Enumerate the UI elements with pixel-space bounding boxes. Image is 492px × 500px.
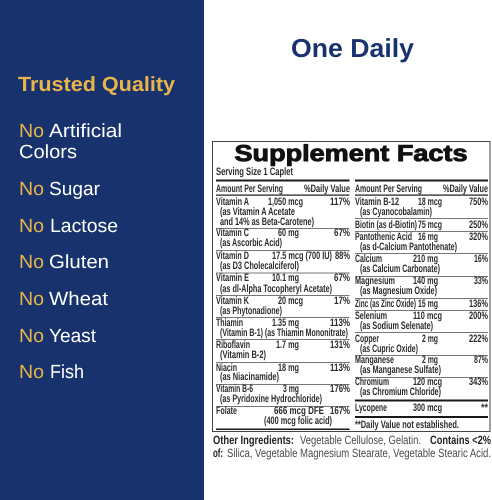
row: vitamin d: 17.5 mcg (700 IU) (272, 250, 332, 262)
row: manganese: (as Manganese Sulfate) (360, 364, 441, 376)
table header: right column: Amount Per Serving (355, 183, 422, 195)
row: pantothenic acid: 16 mg (418, 231, 438, 243)
heading: one daily: One Daily (291, 33, 415, 63)
other ingredients (213, 433, 491, 460)
row: niacin: (as Niacinamide) (220, 371, 279, 383)
row: vitamin a: (as Vitamin A Acetate (220, 206, 295, 218)
table header: left column: %Daily Value (304, 183, 350, 195)
row: magnesium: (as Magnesium Oxide) (360, 285, 437, 297)
row: lycopene: Lycopene (355, 402, 387, 414)
claim: no gluten: Gluten (49, 252, 109, 273)
row: pantothenic acid: Pantothenic Acid (355, 231, 412, 243)
row: vitamin k (216, 295, 350, 317)
row: vitamin b-6: 176% (330, 383, 350, 395)
row: manganese: Manganese (355, 354, 394, 366)
row: chromium (355, 376, 488, 398)
row: vitamin b-6 (216, 383, 350, 405)
row: riboflavin (216, 339, 350, 361)
serving size: Serving Size 1 Caplet (216, 166, 293, 178)
row: vitamin a: 1,050 mcg (268, 196, 303, 208)
row: calcium: 210 mg (413, 253, 438, 265)
other ingredients: Vegetable Cellulose, Gelatin. (300, 433, 421, 447)
row: vitamin e: Vitamin E (216, 272, 249, 284)
claim: no yeast: Yeast (49, 326, 97, 347)
row: zinc: 15 mg (418, 298, 438, 310)
claim: no sugar (19, 179, 101, 200)
row: manganese: 2 mg (422, 354, 438, 366)
row: vitamin k: 20 mcg (278, 295, 303, 307)
row: magnesium: Magnesium (355, 275, 395, 287)
row: niacin (216, 362, 350, 383)
row: vitamin k: 17% (334, 295, 350, 307)
claim: no wheat: Wheat (49, 289, 109, 310)
row: vitamin a: Vitamin A (216, 196, 249, 208)
panel: trusted quality (0, 0, 204, 500)
claim: no wheat: No (19, 289, 44, 310)
row: copper: Copper (355, 333, 380, 345)
row: calcium: Calcium (355, 253, 382, 265)
claim: no artificial colors: Artificial (49, 121, 122, 142)
row: selenium: 110 mcg (413, 310, 442, 322)
claim: no gluten: No (19, 252, 44, 273)
row: calcium: (as Calcium Carbonate) (360, 263, 440, 275)
row: copper (355, 333, 488, 355)
row: vitamin k: (as Phytonadione) (220, 305, 282, 317)
row: thiamin: (Vitamin B-1) (as Thiamin Mononitrate) (220, 327, 348, 339)
row: vitamin a: and 14% as Beta-Carotene) (220, 216, 314, 228)
claim: no fish: No (19, 362, 44, 383)
row: magnesium: 140 mg (413, 275, 438, 287)
row: vitamin e: 10.1 mg (272, 272, 299, 284)
row: riboflavin: 1.7 mg (276, 339, 299, 351)
table header: left column: Amount Per Serving (216, 183, 283, 195)
row: niacin: 18 mg (278, 362, 299, 374)
row: biotin: 75 mcg (418, 219, 442, 231)
row: vitamin d: (as D3 Cholecalciferol) (220, 260, 299, 272)
row: vitamin e: 67% (334, 272, 350, 284)
claim: no lactose: Lactose (50, 216, 118, 237)
row: chromium: (as Chromium Chloride) (360, 386, 441, 398)
row: vitamin b-12 (355, 196, 488, 218)
row: magnesium (355, 275, 488, 297)
claim: no lactose (19, 216, 118, 237)
claim: no gluten (19, 252, 109, 273)
row: chromium: Chromium (355, 376, 389, 388)
row: thiamin: 1.35 mg (272, 317, 299, 329)
row: selenium (355, 310, 488, 332)
claim: no fish: Fish (50, 362, 84, 383)
row: vitamin d: Vitamin D (216, 250, 249, 262)
row: niacin: Niacin (216, 362, 237, 374)
row: manganese (355, 354, 488, 376)
row: thiamin: Thiamin (216, 317, 243, 329)
row: folate: Folate (216, 405, 237, 417)
row: vitamin b-12: 18 mcg (418, 196, 442, 208)
row: vitamin c: 67% (334, 227, 350, 239)
row: vitamin c: (as Ascorbic Acid) (220, 237, 282, 249)
row: riboflavin: Riboflavin (216, 339, 250, 351)
claim: no yeast: No (19, 326, 44, 347)
row: vitamin b-6: Vitamin B-6 (216, 383, 253, 395)
row: vitamin b-12: (as Cyanocobalamin) (360, 206, 432, 218)
claim: no wheat (19, 289, 109, 310)
row: lycopene: ** (481, 402, 489, 414)
row: vitamin e: (as dl-Alpha Tocopheryl Acetate) (220, 283, 332, 295)
claim: no lactose: No (19, 216, 44, 237)
row: copper: 2 mg (422, 333, 438, 345)
other ingredients: Other Ingredients: (213, 433, 294, 447)
row: vitamin d: 88% (335, 250, 350, 262)
row: vitamin b-6: 3 mg (283, 383, 299, 395)
claim: no fish (19, 362, 84, 383)
row: folate: 167% (330, 405, 350, 417)
row: vitamin k: Vitamin K (216, 295, 249, 307)
row: biotin: Biotin (as d-Biotin) (355, 219, 417, 231)
row: lycopene (355, 402, 489, 414)
heading: trusted quality: Trusted Quality (18, 73, 176, 96)
other ingredients: of: (213, 446, 223, 460)
row: folate: (400 mcg folic acid) (264, 415, 332, 427)
row: vitamin c: 60 mg (278, 227, 299, 239)
row: vitamin c (216, 227, 350, 249)
row: zinc: Zinc (as Zinc Oxide) (355, 298, 416, 310)
row: vitamin b-12: Vitamin B-12 (355, 196, 399, 208)
row: selenium: Selenium (355, 310, 387, 322)
row: pantothenic acid (355, 231, 488, 253)
row: thiamin: 113% (330, 317, 350, 329)
claim: no artificial colors (19, 121, 122, 163)
row: lycopene: 300 mcg (413, 402, 442, 414)
row: vitamin b-6: (as Pyridoxine Hydrochloride) (220, 393, 322, 405)
claim: no artificial colors: No (19, 121, 44, 142)
row: calcium (355, 253, 488, 275)
row: riboflavin: (Vitamin B-2) (220, 349, 266, 361)
row: vitamin a (216, 196, 350, 228)
row: vitamin e (216, 272, 350, 295)
row: chromium: 120 mcg (413, 376, 442, 388)
row: vitamin d (216, 250, 350, 272)
row: riboflavin: 131% (330, 339, 350, 351)
claim: no sugar: No (19, 179, 44, 200)
row: selenium: (as Sodium Selenate) (360, 320, 433, 332)
row: folate: 666 mcg DFE (274, 405, 324, 417)
panel: supplement facts (212, 140, 490, 432)
row: thiamin (216, 317, 350, 339)
row: niacin: 113% (330, 362, 350, 374)
title: supplement facts: Supplement Facts (234, 140, 468, 166)
claim: no sugar: Sugar (49, 179, 101, 200)
row: vitamin c: Vitamin C (216, 227, 249, 239)
row: copper: (as Cupric Oxide) (360, 343, 418, 355)
claim: no yeast (19, 326, 97, 347)
claim: no artificial colors: Colors (19, 142, 77, 163)
row: vitamin a: 117% (330, 196, 350, 208)
row: folate (216, 405, 350, 427)
